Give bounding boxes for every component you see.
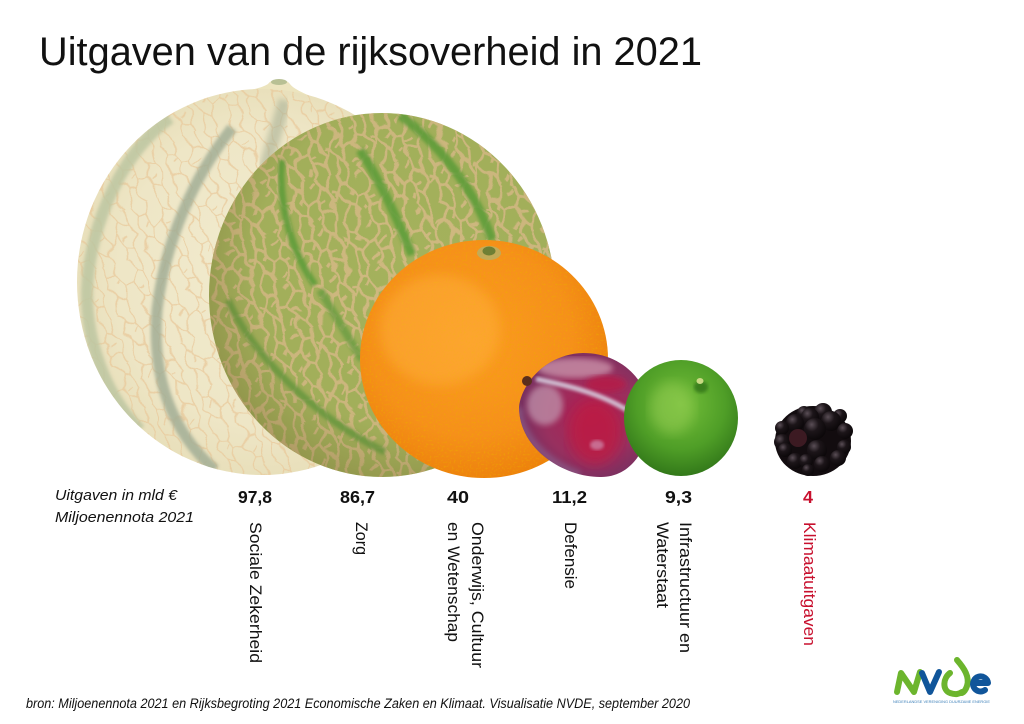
category labels: Zorg xyxy=(352,522,370,555)
fruit: blackberry, Klimaatuitgaven xyxy=(774,403,853,476)
category labels: en Wetenschap xyxy=(444,522,462,642)
category labels xyxy=(246,522,818,669)
category labels: Infrastructuur en xyxy=(676,522,694,653)
values: 9,3 xyxy=(665,487,692,507)
axis caption: Uitgaven in mld € xyxy=(55,488,178,504)
fruit: pale cantaloupe, Sociale Zekerheid xyxy=(77,79,356,475)
title: Uitgaven van de rijksoverheid in 2021 xyxy=(39,30,702,74)
category labels: Klimaatuitgaven xyxy=(800,522,818,646)
fruit: plum, Defensie xyxy=(519,353,649,477)
fruit: netted melon, Zorg xyxy=(209,113,552,477)
values: 11,2 xyxy=(552,487,587,507)
fruit: lime, Infrastructuur en Waterstaat xyxy=(624,360,738,476)
category labels: Defensie xyxy=(561,522,579,589)
logo: NVDE xyxy=(893,660,991,704)
values xyxy=(238,487,813,507)
values: 86,7 xyxy=(340,487,375,507)
axis caption xyxy=(55,488,194,526)
category labels: Onderwijs, Cultuur xyxy=(468,522,486,669)
source line: bron: Miljoenennota 2021 en Rijksbegroting 2021 Economische Zaken en Klimaat. Visualisatie NVDE, september 2020 xyxy=(26,696,690,711)
category labels: Sociale Zekerheid xyxy=(246,522,264,663)
logo subtitle: NEDERLANDSE VERENIGING DUURZAME ENERGIE xyxy=(893,700,991,704)
fruit: orange, Onderwijs xyxy=(358,238,610,480)
axis caption: Miljoenennota 2021 xyxy=(55,510,194,526)
values: 4 xyxy=(803,487,813,507)
values: 40 xyxy=(447,487,469,507)
category labels: Waterstaat xyxy=(653,522,671,608)
values: 97,8 xyxy=(238,487,272,507)
